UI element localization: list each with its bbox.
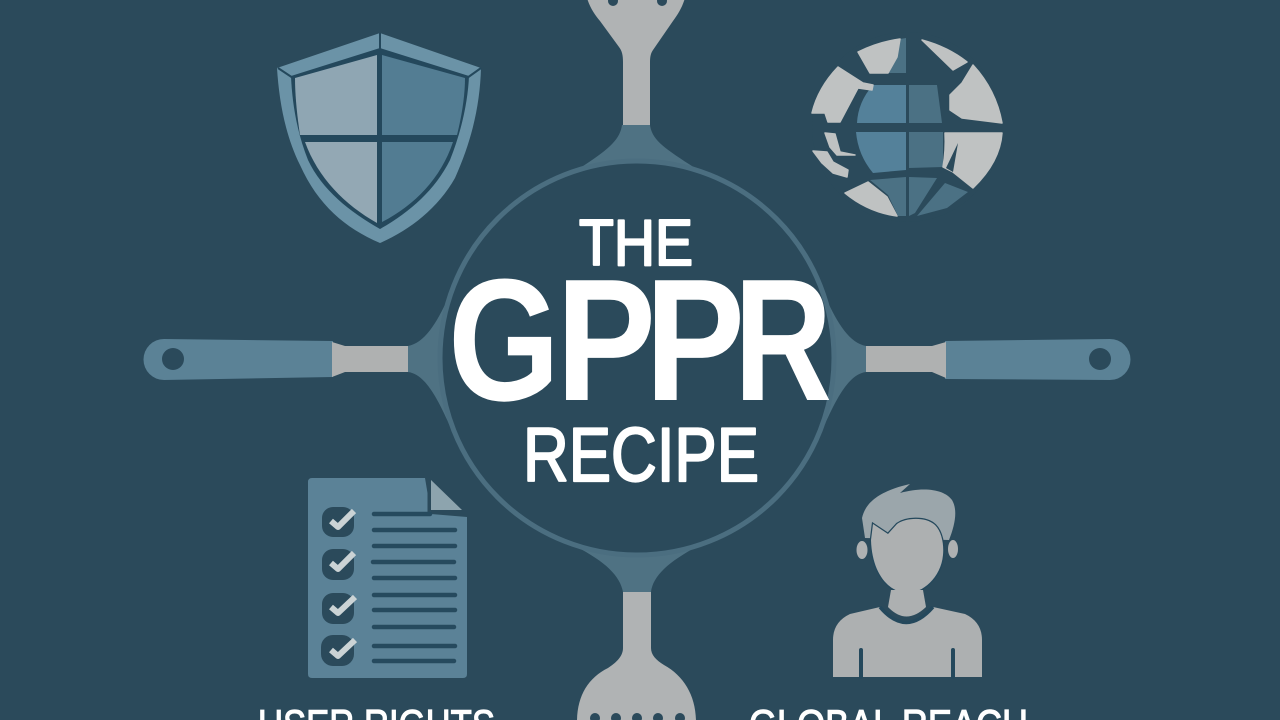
icon: globe xyxy=(812,32,1002,222)
title line: GPPR: P xyxy=(556,242,656,437)
icon: checklist document xyxy=(308,478,467,678)
globe darker panels xyxy=(870,38,968,216)
neck xyxy=(888,590,926,616)
title line: RECIPE: RECIPE xyxy=(523,413,759,498)
top spatula utensil xyxy=(580,0,695,200)
central pan circle xyxy=(440,161,834,555)
checkboxes xyxy=(321,507,354,666)
torso xyxy=(833,607,982,677)
globe ocean panels xyxy=(856,85,906,173)
title xyxy=(448,206,832,498)
bottom spatula utensil xyxy=(575,520,698,720)
head xyxy=(871,519,943,593)
icon: person xyxy=(833,484,982,677)
title line: GPPR: R xyxy=(734,242,832,437)
right handle utensil xyxy=(794,296,1130,424)
title line: GPPR: P xyxy=(645,242,745,437)
check marks xyxy=(331,511,355,656)
title line: THE: THE xyxy=(579,206,693,279)
hair xyxy=(862,484,955,540)
globe land masses xyxy=(812,39,1002,216)
text lines xyxy=(373,514,455,661)
ears xyxy=(856,541,868,559)
page fold xyxy=(431,480,462,510)
left handle utensil xyxy=(143,296,480,424)
icon: shield xyxy=(277,33,481,243)
title line: GPPR: G xyxy=(448,242,560,437)
